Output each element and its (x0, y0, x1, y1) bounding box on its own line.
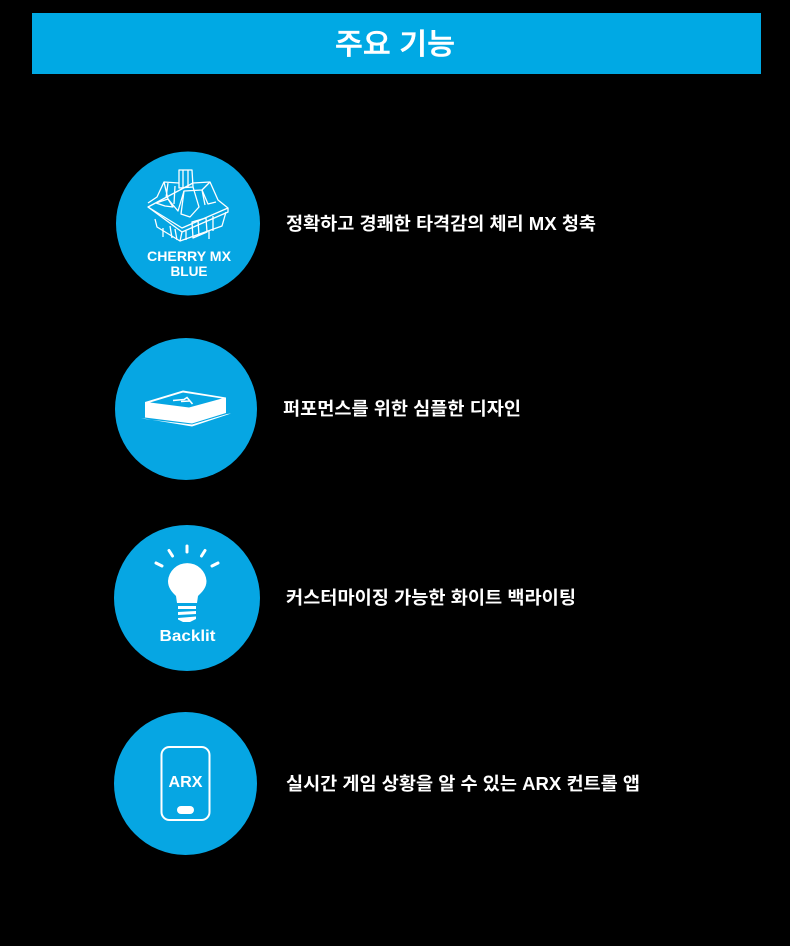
switch label: CHERRY MX (147, 248, 232, 264)
feature 3 text: 커스터마이징 가능한 화이트 백라이팅 (286, 588, 576, 608)
title banner (32, 13, 761, 74)
switch stem (179, 170, 193, 188)
feature 1 icon: Cherry MX Blue switch: BLUE (170, 263, 208, 279)
feature 3 icon: backlit bulb (114, 525, 260, 671)
feature 4 icon: ARX phone (114, 712, 257, 855)
feature 2 text: 퍼포먼스를 위한 심플한 디자인 (283, 399, 521, 419)
feature 1 text: 정확하고 경쾌한 타격감의 체리 MX 청축 (286, 214, 596, 234)
feature 1 icon: Cherry MX Blue switch (116, 152, 260, 296)
feature 4 icon: ARX phone: ARX (168, 774, 203, 791)
feature 4 text: 실시간 게임 상황을 알 수 있는 ARX 컨트롤 앱 (286, 774, 640, 794)
feature 2 icon: keycap (115, 338, 257, 480)
title banner: 주요 기능 (335, 21, 455, 63)
backlit label: Backlit (160, 628, 216, 645)
switch housing (148, 182, 228, 232)
